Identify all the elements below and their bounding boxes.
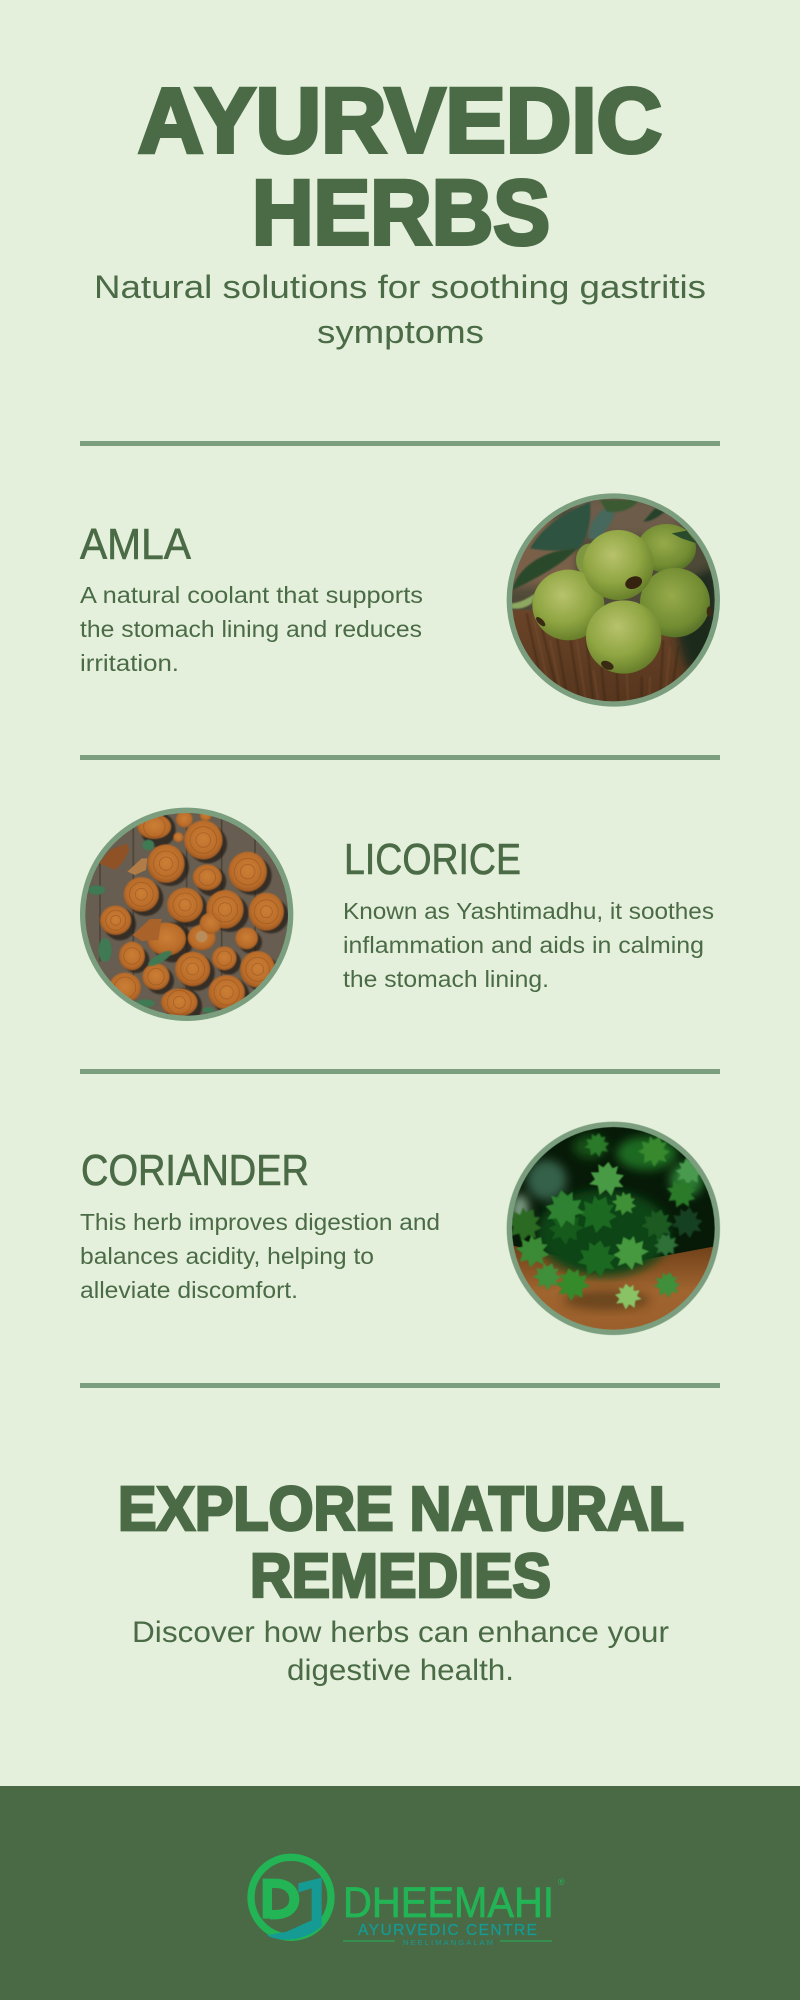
text block: licorice description: Known as Yashtimadhu, it soothes [343,898,714,924]
logo text: ® [558,1877,565,1887]
heading: licorice: LICORICE [344,836,521,884]
text block: coriander description: balances acidity, helping to [80,1243,374,1269]
heading: explore natural remedies: REMEDIES [250,1542,551,1611]
panel: coriander [80,1123,720,1337]
logo text: NEELIMANGALAM [403,1938,493,1947]
image: coriander leaves [501,1123,720,1337]
text block: closing line [132,1616,669,1687]
logo text: DHEEMAHI [343,1879,554,1927]
title: AYURVEDIC [138,70,662,172]
icon: logo mark [251,1857,331,1940]
footer panel [0,1786,800,2000]
heading: coriander: CORIANDER [81,1147,309,1195]
text block: licorice description: the stomach lining. [343,966,549,992]
logo text [343,1877,565,1947]
text block: closing line: digestive health. [287,1654,514,1687]
image: licorice slices [80,808,293,1025]
subtitle: Natural solutions for soothing gastritis [94,269,706,305]
text block: coriander description: This herb improves digestion and [80,1209,440,1235]
text block: amla description [80,582,423,676]
text block: coriander description [80,1209,440,1303]
text block: amla description: A natural coolant that supports [80,582,423,608]
logo text: AYURVEDIC CENTRE [358,1922,537,1939]
heading: explore natural remedies: EXPLORE NATURAL [118,1475,684,1544]
heading: amla: AMLA [80,521,191,569]
title: HERBS [252,162,550,264]
text block: licorice description [343,898,714,992]
text block: licorice description: inflammation and aids in calming [343,932,704,958]
image: amla fruits [507,493,720,707]
text block: amla description: irritation. [80,650,179,676]
panel: amla [80,493,720,707]
text block: coriander description: alleviate discomfort. [80,1277,298,1303]
heading: explore natural remedies [118,1475,684,1611]
title [138,70,662,264]
text block: closing line: Discover how herbs can enhance your [132,1616,669,1649]
subtitle: symptoms [317,314,484,350]
text block: amla description: the stomach lining and reduces [80,616,422,642]
logo [251,1857,565,1947]
subtitle [94,269,706,350]
panel: licorice [80,808,714,1025]
